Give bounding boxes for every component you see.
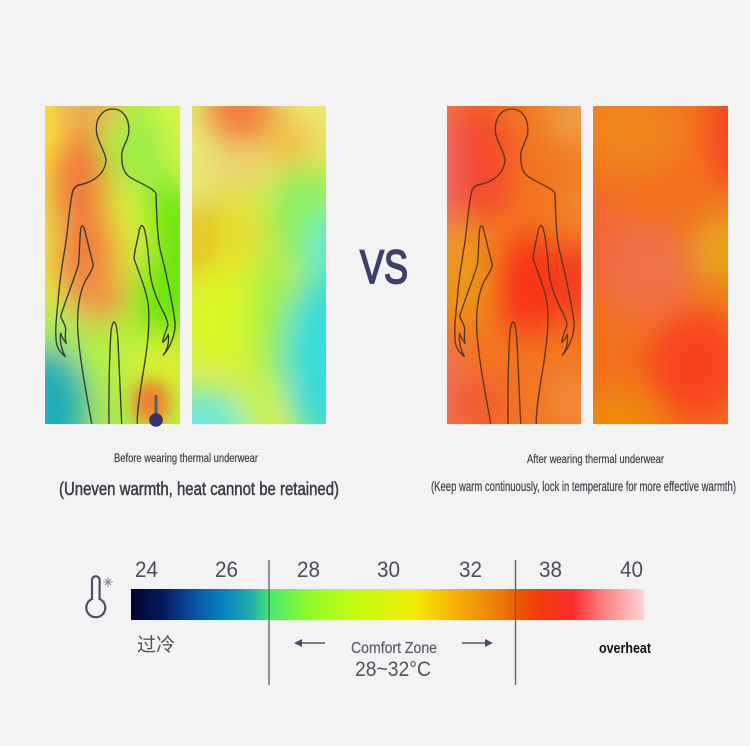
icon: small thermometer bbox=[149, 395, 163, 427]
heatmap panel: before, back bbox=[192, 106, 326, 424]
label: comfort range: 28~32°C bbox=[355, 658, 431, 681]
arrow: left bbox=[294, 639, 325, 647]
icon: thermometer with snowflake bbox=[86, 576, 113, 617]
temperature scale numbers: 32 bbox=[459, 557, 482, 582]
temperature scale numbers: 26 bbox=[215, 557, 238, 582]
temperature scale numbers: 38 bbox=[539, 557, 562, 582]
temperature scale numbers bbox=[135, 557, 643, 582]
body outline: before bbox=[56, 109, 175, 423]
temperature scale numbers: 40 bbox=[620, 557, 643, 582]
label: too cold: 过冷 bbox=[137, 634, 175, 656]
caption: uneven warmth: (Uneven warmth, heat cannot be retained) bbox=[59, 479, 339, 499]
caption: before wearing: Before wearing thermal underwear bbox=[114, 453, 258, 465]
temperature scale numbers: 28 bbox=[297, 557, 320, 582]
heading: VS: VS bbox=[360, 240, 408, 293]
temperature scale numbers: 30 bbox=[377, 557, 400, 582]
label: overheat: overheat bbox=[599, 640, 651, 657]
heatmap panel: after, front with body outline bbox=[447, 106, 581, 424]
temperature scale numbers: 24 bbox=[135, 557, 158, 582]
caption: after wearing: After wearing thermal underwear bbox=[527, 454, 664, 466]
temperature gradient bar bbox=[131, 589, 644, 620]
comfort zone boundary lines bbox=[269, 560, 516, 685]
label: comfort zone: Comfort Zone bbox=[351, 640, 437, 657]
heatmap panel: after, back bbox=[593, 106, 728, 424]
arrow: right bbox=[462, 639, 493, 647]
heatmap panel: before, front with body outline bbox=[45, 106, 180, 424]
body outline: after bbox=[455, 109, 574, 423]
